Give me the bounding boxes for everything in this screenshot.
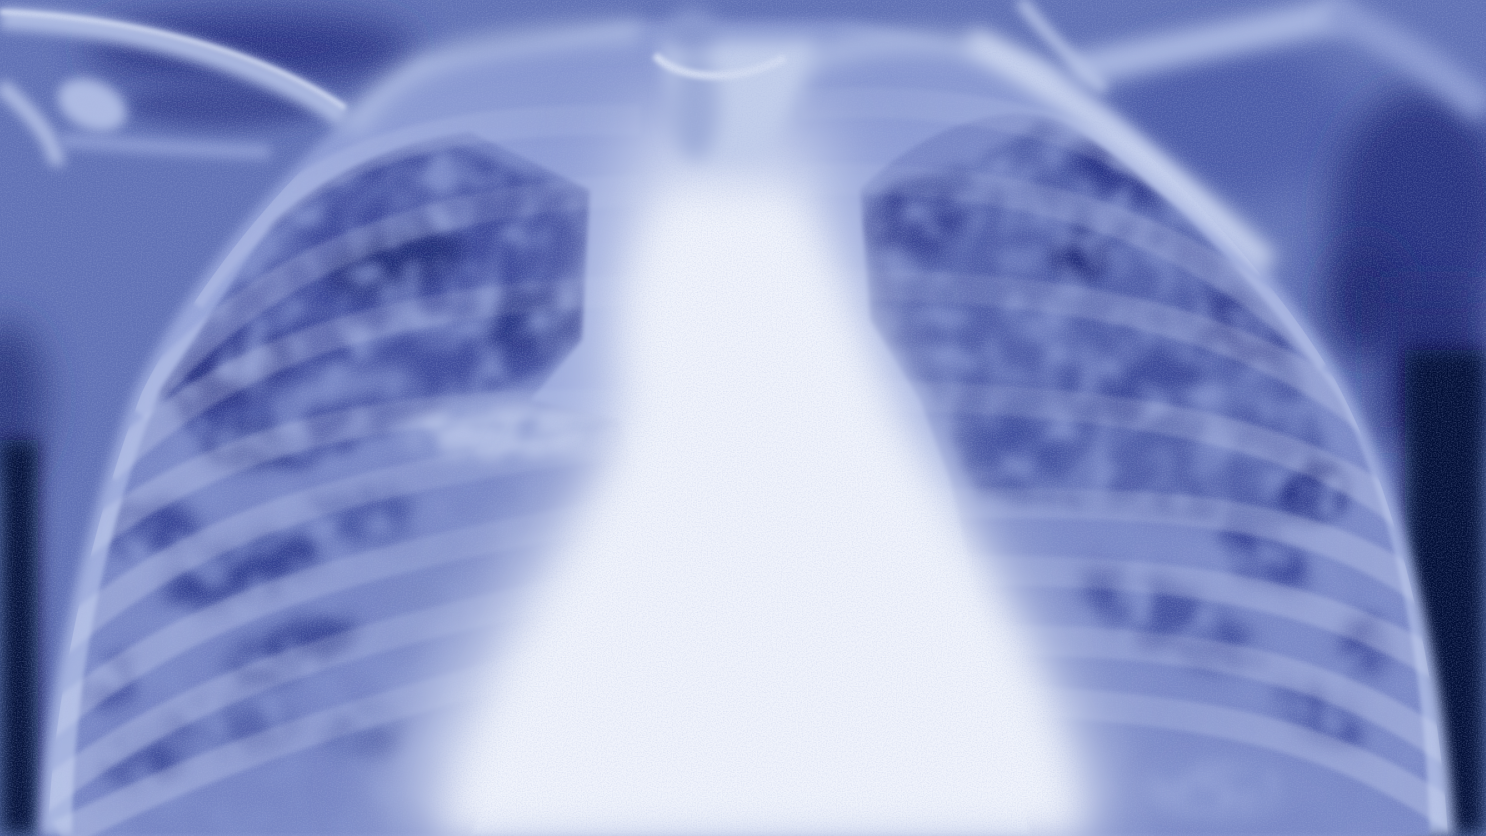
- left ribs: [50, 109, 590, 836]
- left lung: [70, 132, 606, 836]
- right ribs: [866, 92, 1448, 832]
- collarbones and shoulder bones: [0, 0, 1486, 265]
- right lung: [860, 114, 1432, 836]
- mediastinum and heart: [390, 8, 1120, 836]
